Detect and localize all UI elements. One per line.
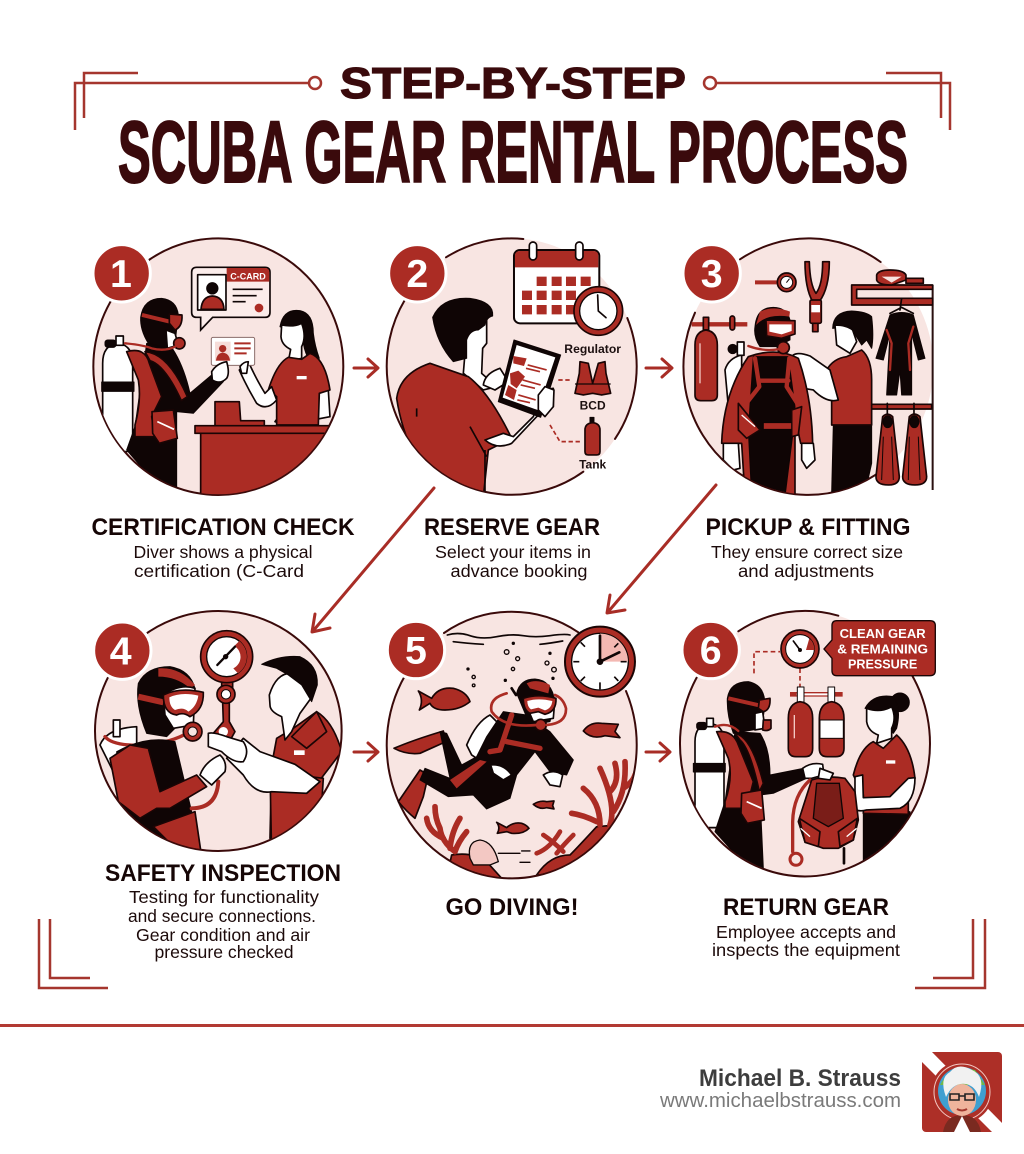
footer website: www.michaelbstrauss.com [659,1090,901,1112]
step badge 6 [682,621,739,679]
arrow: step 5 to 6 [646,743,670,761]
fins [876,403,927,485]
coral [427,762,635,878]
bubbles [467,642,556,687]
logo [921,1051,1003,1133]
diver with tank [102,298,248,493]
step badge 1: 1 [110,252,132,296]
wetsuit on hanger [876,298,925,395]
regulator hoses [805,262,829,332]
tank icon [585,417,600,455]
label: regulator: Regulator [564,342,621,356]
fish [418,688,620,833]
diver with tank [693,682,824,868]
step badge 2: 2 [406,252,428,296]
pressure gauge [755,273,796,292]
id card in hand [211,337,255,365]
callout: clean gear and remaining pressure: PRESSURE [848,657,917,671]
returned bcd [790,777,858,865]
footer divider [0,1024,1024,1027]
panel 3: pickup and fitting illustration [683,238,933,497]
diver being fitted [722,307,815,497]
step 3 caption [706,514,910,581]
step badge 3 [683,245,740,302]
arrow: step 2 to 4 diagonal [312,488,434,632]
step 4 caption [105,860,341,962]
counter and staff member [195,310,330,497]
step 3 caption: and adjustments [738,561,874,581]
step 4 caption: and secure connections. [128,906,316,926]
diver with mask [100,667,226,850]
step badge 4 [94,622,151,679]
title block frame [75,73,950,130]
arrow: step 2 to 3 [646,359,672,377]
step badge 5 [387,621,445,679]
arrow: step 4 to 5 [354,743,378,761]
pressure gauge [781,630,819,668]
step 5 caption: GO DIVING! [446,894,578,921]
step 6 caption: inspects the equipment [712,940,900,960]
step 6 caption: RETURN GEAR [723,894,889,921]
c-card speech bubble [192,267,270,330]
c-card speech bubble: C-CARD [230,271,266,281]
step 1 caption: Diver shows a physical [134,542,312,562]
step 1 caption [92,514,355,581]
dashed connectors [550,380,580,442]
step 1 caption: CERTIFICATION CHECK [92,514,355,541]
arrow: step 1 to 2 [354,359,378,377]
title: step-by-step: STEP-BY-STEP [340,59,686,108]
wall tank [692,316,747,401]
arrow: step 3 to 5 diagonal [607,485,716,613]
step badge 4: 4 [110,629,132,673]
step 3 caption: PICKUP & FITTING [706,514,910,541]
step 2 caption: advance booking [450,561,588,581]
step badge 6: 6 [700,629,722,673]
step 1 caption: certification (C-Card [134,561,304,581]
step 4 caption: pressure checked [154,942,294,962]
staff member fitting [789,311,873,493]
gear rack [852,285,933,490]
step badge 2 [389,245,446,302]
step 4 caption: SAFETY INSPECTION [105,860,341,887]
step 2 caption: RESERVE GEAR [424,514,600,541]
step badge 5: 5 [405,629,427,673]
inspection gauges [201,631,253,762]
step 2 caption [424,514,600,581]
callout: clean gear and remaining pressure: & REMAINING [837,643,928,657]
step 4 caption: Testing for functionality [129,887,319,907]
callout: clean gear and remaining pressure [824,621,935,676]
step badge 1 [93,245,150,302]
dive timer clock [565,627,635,697]
staff member [227,656,342,855]
step badge 3: 3 [701,252,723,296]
step 2 caption: Select your items in [435,542,591,562]
panel 6: return gear illustration [680,611,935,876]
diver swimming [394,679,573,818]
water surface waves [447,633,570,644]
step 3 caption: They ensure correct size [711,542,903,562]
clock [574,287,623,335]
dashed pressure connector [754,652,800,687]
man with tablet [397,298,561,497]
label: tank: Tank [579,457,607,471]
step 6 caption [712,894,900,960]
mask on shelf [877,270,923,285]
bcd vest icon [575,362,611,395]
hand on bcd top [818,768,833,780]
panel 1: certification check illustration [93,238,343,497]
label: bcd: BCD [580,398,606,412]
footer author name: Michael B. Strauss [699,1065,901,1092]
calendar [514,242,599,323]
twin tanks [788,687,844,757]
panel 5: go diving illustration [387,612,637,878]
panel 2: reserve gear illustration [387,238,637,497]
panel 4: safety inspection illustration [94,611,342,855]
staff member [852,692,916,860]
callout: clean gear and remaining pressure: CLEAN GEAR [840,627,926,641]
lower corner brackets [39,919,985,988]
step 4 caption: Gear condition and air [136,925,310,945]
step 6 caption: Employee accepts and [716,922,896,942]
